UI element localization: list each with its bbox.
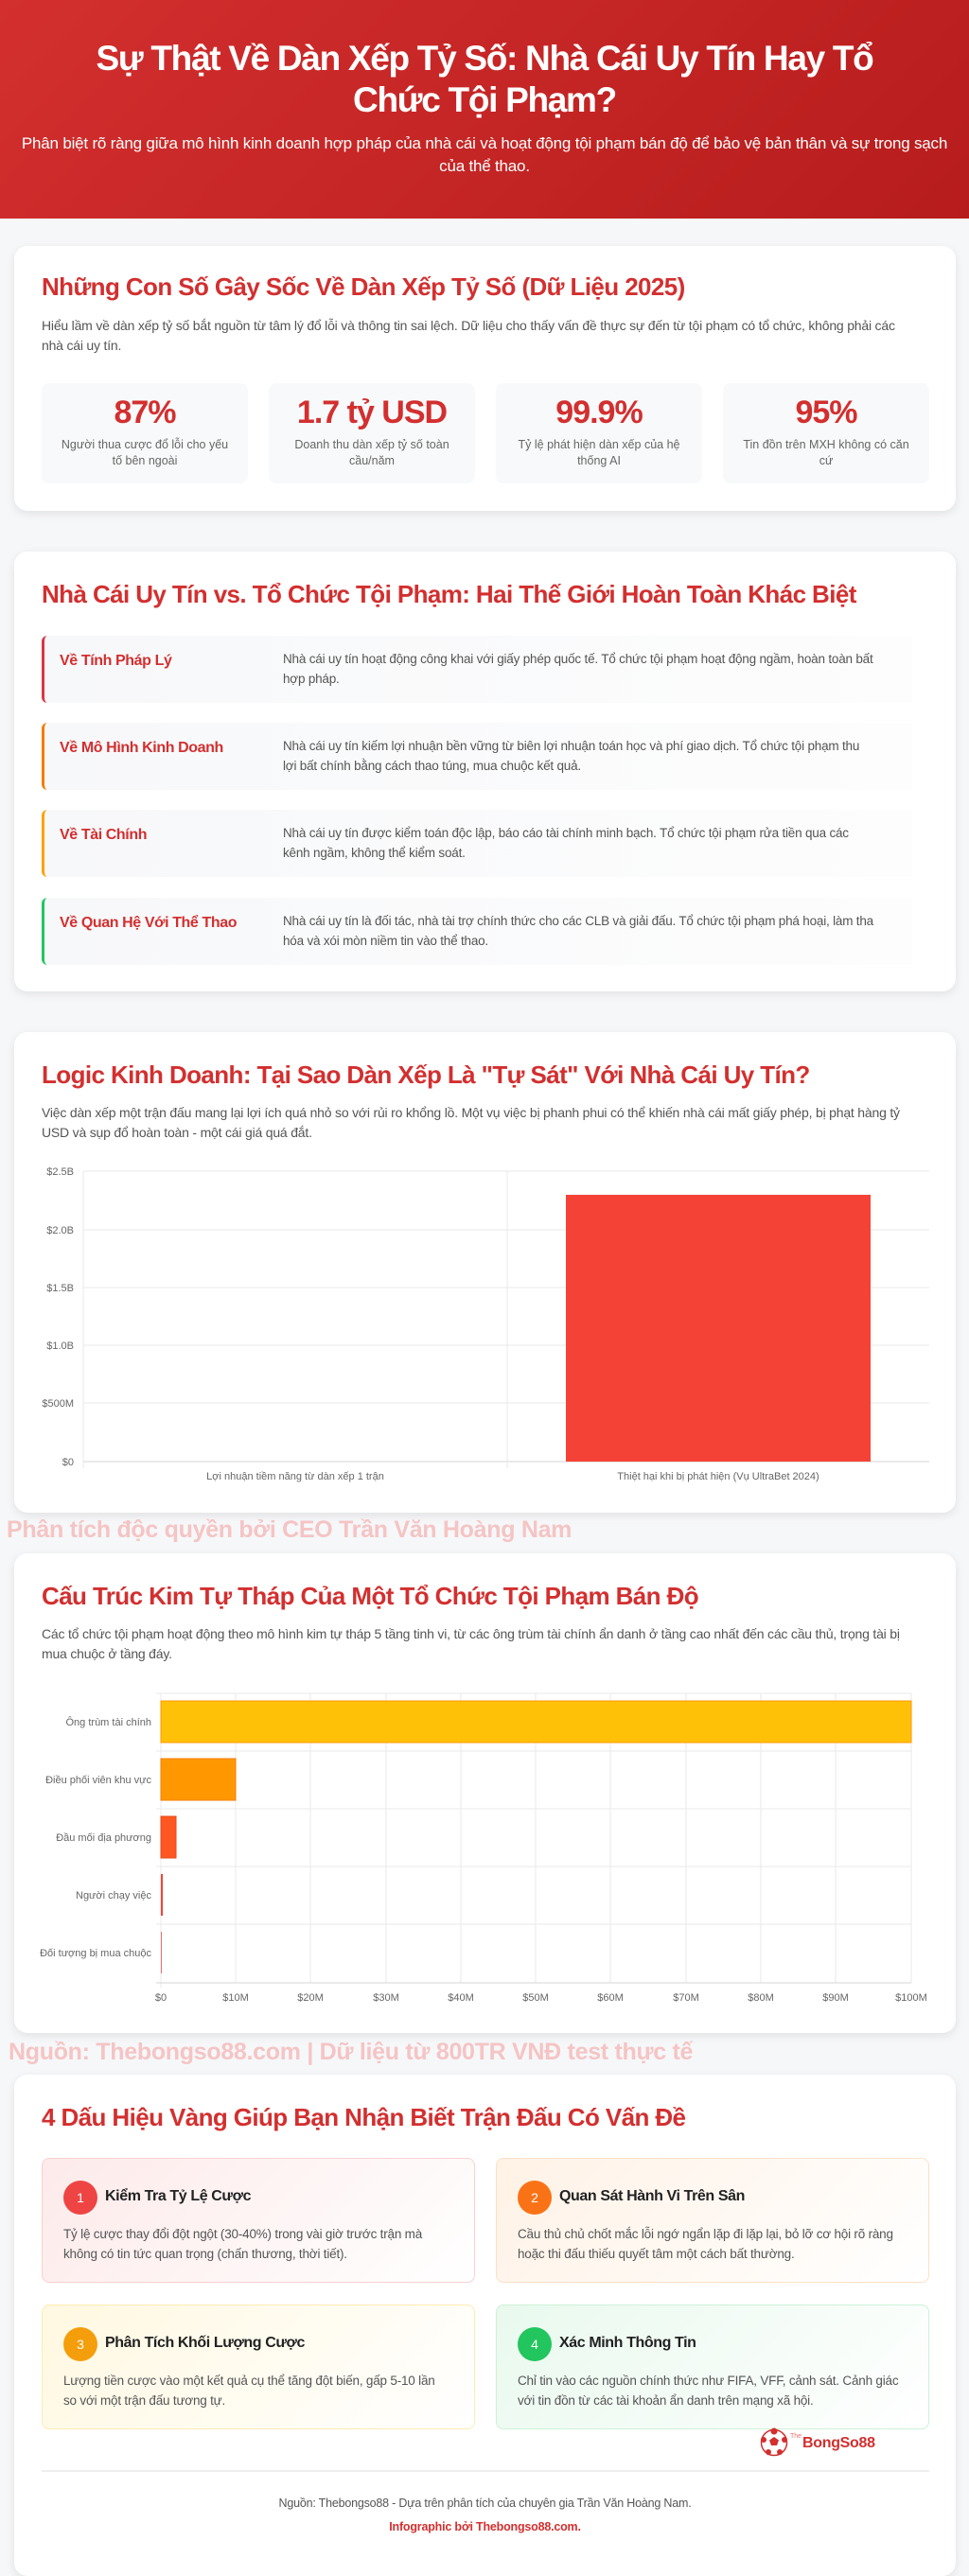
- sign 2: Quan Sát Hành Vi Trên Sân: [559, 2188, 745, 2204]
- bar chart: profit vs damage: Thiệt hại khi bị phát hiện (Vụ UltraBet 2024): [617, 1471, 819, 1482]
- row: sports relation: Nhà cái uy tín là đối tác, nhà tài trợ chính thức cho các CLB và giải đấu. Tổ chức tội phạm phá hoại, làm tha hóa và xói mòn niềm tin vào thể thao.: [283, 914, 873, 948]
- horizontal bar chart: $50M: [522, 1992, 549, 2004]
- stat: 87%: Người thua cược đổ lỗi cho yếu tố bên ngoài: [62, 438, 228, 467]
- horizontal bar chart: [40, 1693, 927, 2004]
- header banner: [0, 0, 969, 219]
- sign 3: Phân Tích Khối Lượng Cược: [105, 2335, 305, 2351]
- sign 4: 4: [531, 2337, 538, 2352]
- bar chart: profit vs damage: $1.0B: [46, 1341, 74, 1352]
- stat: 95%: [723, 383, 929, 483]
- watermark: source: Nguồn: Thebongso88.com | Dữ liệu từ 800TR VNĐ test thực tế: [9, 2039, 693, 2065]
- sign 3: 3: [77, 2337, 84, 2352]
- bar chart: profit vs damage: Lợi nhuận tiềm năng từ dàn xếp 1 trận: [206, 1471, 384, 1482]
- horizontal bar chart: $90M: [822, 1992, 849, 2004]
- footer text: Nguồn: Thebongso88 - Dựa trên phân tích của chuyên gia Trần Văn Hoàng Nam.: [278, 2497, 691, 2510]
- panel: shocking numbers: [14, 246, 956, 511]
- sign 4: [496, 2304, 929, 2429]
- sign 3: Lượng tiền cược vào một kết quả cụ thể tăng đột biến, gấp 5-10 lần so với một trận đấu tương tự.: [63, 2374, 435, 2408]
- stat: 1.7 ty USD: [269, 383, 475, 483]
- heading: Những Con Số Gây Sốc Về Dàn Xếp Tỷ Số (Dữ Liệu 2025): [42, 272, 685, 301]
- sign 1: 1: [77, 2190, 84, 2205]
- horizontal bar chart: $70M: [673, 1992, 699, 2004]
- heading: 4 Dấu Hiệu Vàng Giúp Bạn Nhận Biết Trận Đấu Có Vấn Đề: [42, 2103, 685, 2131]
- horizontal bar chart: $80M: [748, 1992, 774, 2004]
- horizontal bar chart: Đối tượng bị mua chuộc: [40, 1948, 151, 1959]
- panel: business logic: [14, 1032, 956, 1513]
- sign 2: Cầu thủ chủ chốt mắc lỗi ngớ ngẩn lặp đi lặp lại, bỏ lỡ cơ hội rõ ràng hoặc thi đấu thiếu quyết tâm một cách bất thường.: [518, 2227, 893, 2261]
- row: business model: [42, 723, 912, 790]
- sign 1: Tỷ lệ cược thay đổi đột ngột (30-40%) trong vài giờ trước trận mà không có tin tức quan trọng (chấn thương, thời tiết).: [63, 2227, 422, 2261]
- horizontal bar chart: $10M: [222, 1992, 249, 2004]
- panel: pyramid structure: [14, 1553, 956, 2033]
- heading: Nhà Cái Uy Tín vs. Tổ Chức Tội Phạm: Hai Thế Giới Hoàn Toàn Khác Biệt: [42, 580, 856, 608]
- stat: 99.9%: [496, 383, 702, 483]
- bar chart: profit vs damage: [42, 1166, 929, 1482]
- row: legal: Nhà cái uy tín hoạt động công khai với giấy phép quốc tế. Tổ chức tội phạm hoạt động ngầm, hoàn toàn bất hợp pháp.: [283, 652, 873, 686]
- footer credit: Infographic bởi Thebongso88.com.: [389, 2520, 581, 2533]
- row: business model: Về Mô Hình Kinh Doanh: [60, 740, 223, 756]
- bar chart: profit vs damage: $2.5B: [46, 1166, 74, 1178]
- row: finance: Nhà cái uy tín được kiểm toán độc lập, báo cáo tài chính minh bạch. Tổ chức tội phạm rửa tiền qua các kênh ngầm, không thể kiểm soát.: [283, 826, 849, 860]
- panel: 4 warning signs: [14, 2075, 956, 2576]
- intro text: Việc dàn xếp một trận đấu mang lại lợi ích quá nhỏ so với rủi ro khổng lồ. Một vụ việc bị phanh phui có thể khiến nhà cái mất giấy phép, bị phạt hàng tỷ USD và sụp đổ hoàn toàn - một cái giá quá đắt.: [42, 1105, 900, 1140]
- logo: BongSo88: [761, 2427, 875, 2456]
- horizontal bar chart: Người chạy việc: [76, 1890, 151, 1901]
- horizontal bar chart: $60M: [597, 1992, 624, 2004]
- sign 1: Kiểm Tra Tỷ Lệ Cược: [105, 2188, 251, 2204]
- horizontal bar chart: $40M: [448, 1992, 474, 2004]
- divider: [42, 2470, 929, 2472]
- horizontal bar chart: Ông trùm tài chính: [66, 1716, 151, 1728]
- sign 1: [42, 2158, 475, 2283]
- title: [97, 39, 872, 119]
- row: sports relation: [42, 898, 912, 965]
- row: business model: Nhà cái uy tín kiếm lợi nhuận bền vững từ biên lợi nhuận toán học và phí giao dịch. Tổ chức tội phạm thu lợi bất chính bằng cách thao túng, mua chuộc kết quả.: [283, 739, 859, 773]
- bar chart: profit vs damage: $1.5B: [46, 1283, 74, 1294]
- horizontal bar chart: Đầu mối địa phương: [56, 1832, 151, 1844]
- row: legal: Về Tính Pháp Lý: [60, 653, 171, 669]
- panel: comparison: [14, 552, 956, 991]
- bar chart: profit vs damage: $500M: [42, 1398, 74, 1410]
- horizontal bar chart: $0: [155, 1992, 167, 2004]
- title: Sự Thật Về Dàn Xếp Tỷ Số: Nhà Cái Uy Tín Hay Tổ: [97, 39, 872, 78]
- intro text: Các tổ chức tội phạm hoạt động theo mô hình kim tự tháp 5 tầng tinh vi, từ các ông trùm tài chính ẩn danh ở tầng cao nhất đến các cầu thủ, trọng tài bị mua chuộc ở tầng đáy.: [42, 1626, 900, 1661]
- heading: Cấu Trúc Kim Tự Tháp Của Một Tổ Chức Tội Phạm Bán Độ: [42, 1582, 698, 1610]
- stat: 87%: [42, 383, 248, 483]
- watermark: CEO analysis: Phân tích độc quyền bởi CEO Trần Văn Hoàng Nam: [7, 1516, 572, 1543]
- logo: BongSo88: BongSo88: [802, 2435, 875, 2451]
- stat: 95%: Tin đồn trên MXH không có căn cứ: [743, 438, 909, 467]
- horizontal bar chart: Điều phối viên khu vực: [45, 1775, 151, 1786]
- sign 2: [496, 2158, 929, 2283]
- bar chart: profit vs damage: $2.0B: [46, 1225, 74, 1236]
- horizontal bar chart: $20M: [297, 1992, 324, 2004]
- sign 3: [42, 2304, 475, 2429]
- subtitle: Phân biệt rõ ràng giữa mô hình kinh doanh hợp pháp của nhà cái và hoạt động tội phạm bán độ để bảo vệ bản thân và sự trong sạch của thể thao.: [22, 134, 947, 175]
- stat: 99.9%: 99.9%: [555, 394, 643, 430]
- stat: 1.7 ty USD: Doanh thu dàn xếp tỷ số toàn cầu/năm: [294, 438, 449, 467]
- stat: 1.7 ty USD: 1.7 tỷ USD: [297, 394, 447, 430]
- stat: 99.9%: Tỷ lệ phát hiện dàn xếp của hệ thống AI: [519, 438, 679, 467]
- row: sports relation: Về Quan Hệ Với Thể Thao: [60, 915, 237, 931]
- row: finance: Về Tài Chính: [60, 827, 147, 843]
- row: legal: [42, 636, 912, 703]
- title: Chức Tội Phạm?: [353, 80, 616, 119]
- stat: 87%: 87%: [114, 394, 176, 430]
- sign 4: Chỉ tin vào các nguồn chính thức như FIFA, VFF, cảnh sát. Cảnh giác với tin đồn từ các tài khoản ẩn danh trên mạng xã hội.: [518, 2374, 898, 2408]
- heading: Logic Kinh Doanh: Tại Sao Dàn Xếp Là "Tự Sát" Với Nhà Cái Uy Tín?: [42, 1060, 810, 1089]
- intro text: Hiểu lầm về dàn xếp tỷ số bắt nguồn từ tâm lý đổ lỗi và thông tin sai lệch. Dữ liệu cho thấy vấn đề thực sự đến từ tội phạm có tổ chức, không phải các nhà cái uy tín.: [42, 318, 895, 353]
- sign 4: Xác Minh Thông Tin: [559, 2335, 696, 2351]
- logo: BongSo88: The: [790, 2433, 802, 2440]
- horizontal bar chart: $100M: [895, 1992, 927, 2004]
- bar chart: profit vs damage: $0: [62, 1457, 74, 1468]
- row: finance: [42, 810, 912, 877]
- horizontal bar chart: $30M: [373, 1992, 399, 2004]
- stat: 95%: 95%: [795, 394, 857, 430]
- sign 2: 2: [531, 2190, 538, 2205]
